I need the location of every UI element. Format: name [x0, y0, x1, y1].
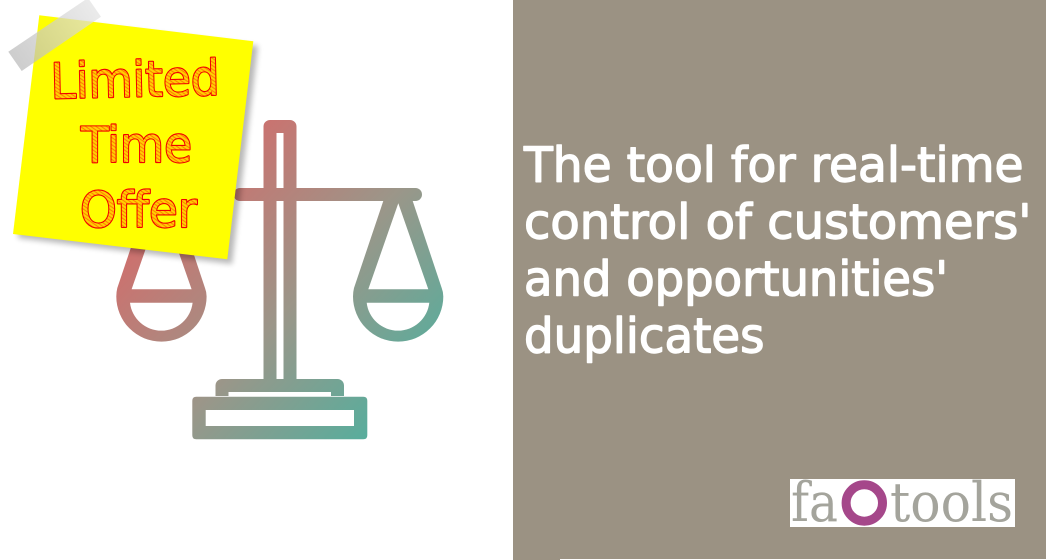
note text: Offer [80, 182, 198, 239]
lower base [192, 397, 367, 439]
note text [50, 50, 220, 239]
sticky note shadow [18, 20, 258, 264]
logo [790, 471, 1015, 534]
right pan [353, 198, 443, 342]
logo text tools: tools [890, 471, 1013, 534]
tape [8, 0, 101, 71]
scale beam [240, 188, 416, 201]
note text: Time [80, 117, 192, 174]
panel: text background [513, 0, 1046, 560]
heading: control of customers' [524, 194, 1032, 250]
heading: The tool for real-time [523, 138, 1024, 194]
scale post [270, 126, 290, 379]
icon: balance scale [116, 126, 443, 439]
heading: duplicates [524, 308, 764, 364]
note text: Limited [50, 50, 220, 110]
logo text fa: fa [791, 471, 838, 534]
left pan [116, 198, 207, 342]
upper base [222, 386, 338, 396]
note paper [13, 15, 253, 259]
logo background [790, 479, 1015, 527]
heading [523, 138, 1032, 364]
heading: and opportunities' [524, 252, 948, 308]
logo ring [846, 485, 882, 521]
sticky note [13, 15, 253, 259]
